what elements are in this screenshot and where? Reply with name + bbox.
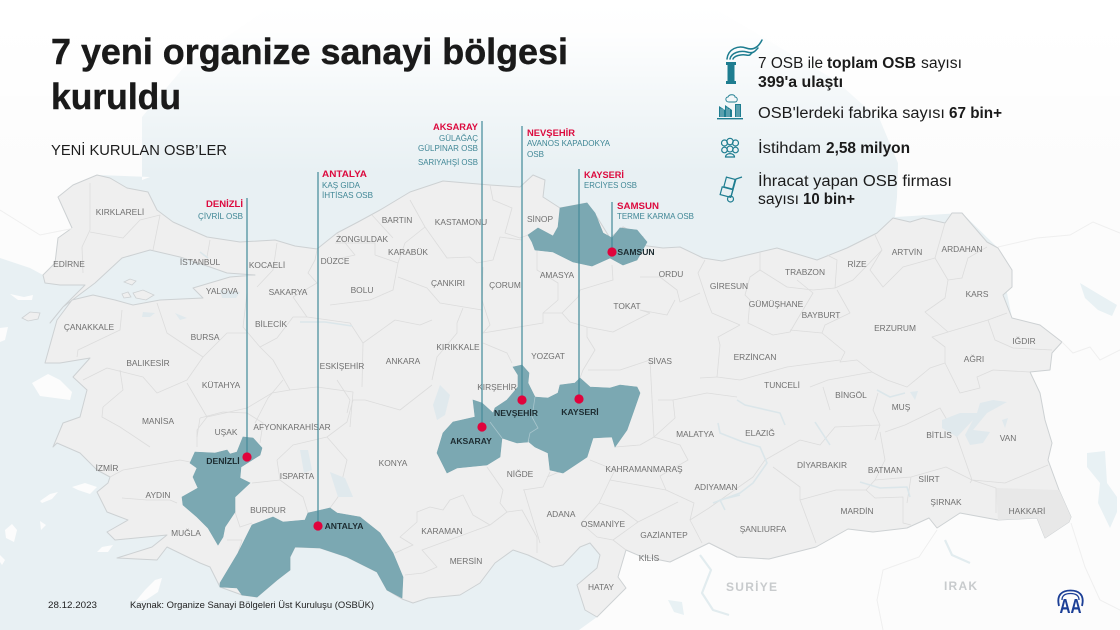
province: Samsun: [528, 203, 647, 266]
title: 7 yeni organize sanayi bölgesi: [51, 31, 568, 72]
callout: Samsun: SAMSUN: [617, 201, 659, 212]
province name labels: YALOVA: [206, 286, 239, 296]
callout: Aksaray: [418, 121, 487, 432]
callout: Nevşehir: OSB: [527, 150, 545, 159]
province name labels: İZMİR: [96, 463, 118, 473]
province name labels: RİZE: [847, 259, 867, 269]
callout: Samsun: TERME KARMA OSB: [617, 212, 695, 221]
Greek islands: [0, 294, 162, 602]
title: [51, 31, 568, 117]
province name labels: BOLU: [351, 285, 373, 295]
callout: Aksaray: SARIYAHŞİ OSB: [418, 157, 479, 167]
callout: Denizli: DENİZLİ: [206, 199, 243, 210]
province name labels: ÇANKIRI: [431, 278, 465, 288]
callout: Samsun: [607, 201, 695, 257]
province name labels: KASTAMONU: [435, 217, 487, 227]
province name labels: UŞAK: [215, 427, 238, 437]
province name labels: BİTLİS: [926, 430, 952, 440]
callout: Nevşehir: AVANOS KAPADOKYA: [527, 139, 611, 148]
province name labels: BAYBURT: [802, 310, 840, 320]
province name labels: AMASYA: [540, 270, 575, 280]
province name labels: MERSİN: [450, 556, 482, 566]
province name labels: KARABÜK: [388, 247, 428, 257]
stat: factories: 67 bin+: [949, 105, 1002, 122]
province name labels: KOCAELİ: [249, 260, 285, 270]
stat: total OSB: sayısı: [921, 55, 962, 72]
title: kuruldu: [51, 76, 181, 117]
stat: employment: [758, 139, 910, 157]
province name labels: BURDUR: [250, 505, 286, 515]
stat: total OSB: 399'a ulaştı: [758, 74, 843, 91]
province name labels: MALATYA: [676, 429, 714, 439]
province name labels: GİRESUN: [710, 281, 748, 291]
country labels: [726, 579, 977, 594]
lakes: [142, 283, 1117, 528]
icon: AA logo: AA: [1060, 596, 1082, 618]
stat: employment: İstihdam: [758, 139, 821, 157]
province borders: [77, 183, 1052, 575]
icon: factory: [717, 95, 743, 119]
province name labels: KİLİS: [639, 553, 660, 563]
country labels: IRAK: [944, 579, 977, 593]
province name labels: TOKAT: [613, 301, 641, 311]
province name labels: KIRIKKALE: [436, 342, 480, 352]
province name labels: AĞRI: [964, 354, 984, 364]
province name labels: [53, 207, 1045, 592]
neighbouring land: Syria and Iraq: [579, 500, 1120, 630]
highlighted province labels: KAYSERİ: [561, 407, 599, 417]
province name labels: ŞIRNAK: [930, 497, 962, 507]
callout: Aksaray: GÜLAĞAÇ: [439, 133, 478, 143]
callout: Aksaray: GÜLPINAR OSB: [418, 143, 479, 153]
province name labels: IĞDIR: [1012, 336, 1036, 346]
stat: exporters: [758, 172, 952, 208]
province name labels: ÇORUM: [489, 280, 521, 290]
icon: people group: [722, 138, 738, 157]
province name labels: YOZGAT: [531, 351, 565, 361]
province name labels: GÜMÜŞHANE: [749, 299, 804, 309]
province name labels: AYDIN: [146, 490, 170, 500]
province name labels: ADIYAMAN: [694, 482, 738, 492]
stat: total OSB: toplam OSB: [827, 55, 916, 72]
small Turkish islands: [22, 279, 154, 321]
province name labels: BİNGÖL: [835, 390, 867, 400]
province name labels: SİİRT: [918, 474, 940, 484]
province name labels: KAHRAMANMARAŞ: [605, 464, 683, 474]
callout: Antalya: ANTALYA: [322, 169, 367, 180]
stat: factories: OSB'lerdeki fabrika sayısı: [758, 105, 945, 122]
callout: Nevşehir: NEVŞEHİR: [527, 128, 575, 139]
province name labels: KÜTAHYA: [202, 380, 241, 390]
province: Kayseri: [529, 378, 640, 473]
callout: Kayseri: ERCİYES OSB: [584, 180, 638, 190]
province name labels: BARTIN: [382, 215, 412, 225]
callout: Kayseri: [574, 169, 638, 404]
stat: exporters: sayısı: [758, 191, 799, 208]
top white fade: [0, 0, 1120, 175]
callout: Antalya: İHTİSAS OSB: [322, 190, 374, 200]
province name labels: GAZİANTEP: [640, 530, 688, 540]
province name labels: SİVAS: [648, 356, 672, 366]
province name labels: ESKİŞEHİR: [320, 361, 364, 371]
callout: Kayseri: KAYSERİ: [584, 170, 624, 181]
province name labels: SAKARYA: [269, 287, 308, 297]
province: Antalya: [220, 508, 403, 598]
shaded Hakkari district: [996, 488, 1071, 538]
province name labels: DİYARBAKIR: [797, 460, 847, 470]
stat: total OSB: 7 OSB ile: [758, 55, 823, 72]
province name labels: BİLECİK: [255, 319, 287, 329]
icon: AA logo: [1058, 590, 1083, 618]
province name labels: EDİRNE: [53, 259, 85, 269]
province name labels: NİĞDE: [507, 469, 534, 479]
province name labels: MANİSA: [142, 416, 174, 426]
province name labels: ORDU: [659, 269, 683, 279]
province name labels: SİNOP: [527, 214, 553, 224]
highlighted province labels: ANTALYA: [325, 521, 363, 531]
province name labels: ŞANLIURFA: [740, 524, 787, 534]
province name labels: MUŞ: [892, 402, 911, 412]
highlighted province labels: DENİZLİ: [206, 456, 240, 466]
province name labels: TUNCELİ: [764, 380, 800, 390]
subtitle: YENİ KURULAN OSB’LER: [51, 141, 227, 159]
rivers and dam lakes: [200, 252, 910, 510]
callout: Denizli: ÇİVRİL OSB: [198, 211, 244, 221]
highlighted province labels: NEVŞEHİR: [494, 408, 539, 418]
neighbouring borders: [0, 210, 1120, 630]
stat: total OSB: [758, 55, 962, 91]
date: 28.12.2023: [48, 600, 97, 611]
province name labels: ZONGULDAK: [336, 234, 388, 244]
province name labels: ÇANAKKALE: [64, 322, 115, 332]
highlighted province labels: SAMSUN: [617, 247, 655, 257]
province name labels: HAKKARİ: [1009, 506, 1045, 516]
province name labels: OSMANİYE: [581, 519, 626, 529]
icon: hand truck with boxes: [720, 177, 742, 202]
callout: Antalya: [313, 169, 374, 531]
callout: Antalya: KAŞ GIDA: [322, 181, 361, 190]
province name labels: ISPARTA: [280, 471, 315, 481]
province name labels: ARDAHAN: [942, 244, 982, 254]
source: Kaynak: Organize Sanayi Bölgeleri Üst Kuruluşu (OSBÜK): [130, 600, 374, 611]
province name labels: DÜZCE: [321, 256, 350, 266]
province name labels: ADANA: [547, 509, 576, 519]
icon: chimney with smoke: [726, 40, 762, 84]
province name labels: BATMAN: [868, 465, 902, 475]
rivers and lakes in Syria and Iraq: [668, 540, 970, 615]
province name labels: KIRKLARELİ: [96, 207, 144, 217]
province name labels: İSTANBUL: [180, 257, 221, 267]
highlighted province labels: AKSARAY: [450, 436, 492, 446]
province name labels: ERZURUM: [874, 323, 916, 333]
stat: employment: 2,58 milyon: [826, 140, 910, 157]
province name labels: KONYA: [379, 458, 408, 468]
province name labels: BALIKESİR: [126, 358, 170, 368]
province name labels: HATAY: [588, 582, 614, 592]
province name labels: VAN: [1000, 433, 1016, 443]
highlighted province labels: [206, 247, 655, 531]
highlighted provinces: [182, 203, 647, 598]
province name labels: AFYONKARAHİSAR: [253, 422, 331, 432]
province name labels: MUĞLA: [171, 528, 201, 538]
country labels: SURİYE: [726, 579, 777, 594]
province name labels: KIRŞEHİR: [477, 382, 517, 392]
province: Nevşehir: [490, 365, 538, 443]
stat: exporters: İhracat yapan OSB firması: [758, 172, 952, 190]
province name labels: BURSA: [191, 332, 220, 342]
province name labels: ERZİNCAN: [734, 352, 776, 362]
stat: exporters: 10 bin+: [803, 191, 855, 208]
province name labels: TRABZON: [785, 267, 825, 277]
province name labels: ARTVİN: [892, 247, 922, 257]
neighbouring land: Caucasus and Iran: [700, 0, 1120, 630]
province name labels: MARDİN: [840, 506, 874, 516]
province: Aksaray: [437, 400, 502, 473]
callout: Denizli: [198, 198, 252, 462]
province name labels: ANKARA: [386, 356, 421, 366]
callout: Nevşehir: [517, 126, 611, 405]
Turkey landmass: [43, 175, 1071, 617]
neighbouring land: Bulgaria and Greece: [0, 0, 280, 275]
callout: Aksaray: AKSARAY: [433, 122, 479, 133]
province: Denizli: [182, 437, 262, 545]
province name labels: KARS: [966, 289, 989, 299]
province name labels: ELAZIĞ: [745, 428, 775, 438]
province name labels: KARAMAN: [421, 526, 463, 536]
